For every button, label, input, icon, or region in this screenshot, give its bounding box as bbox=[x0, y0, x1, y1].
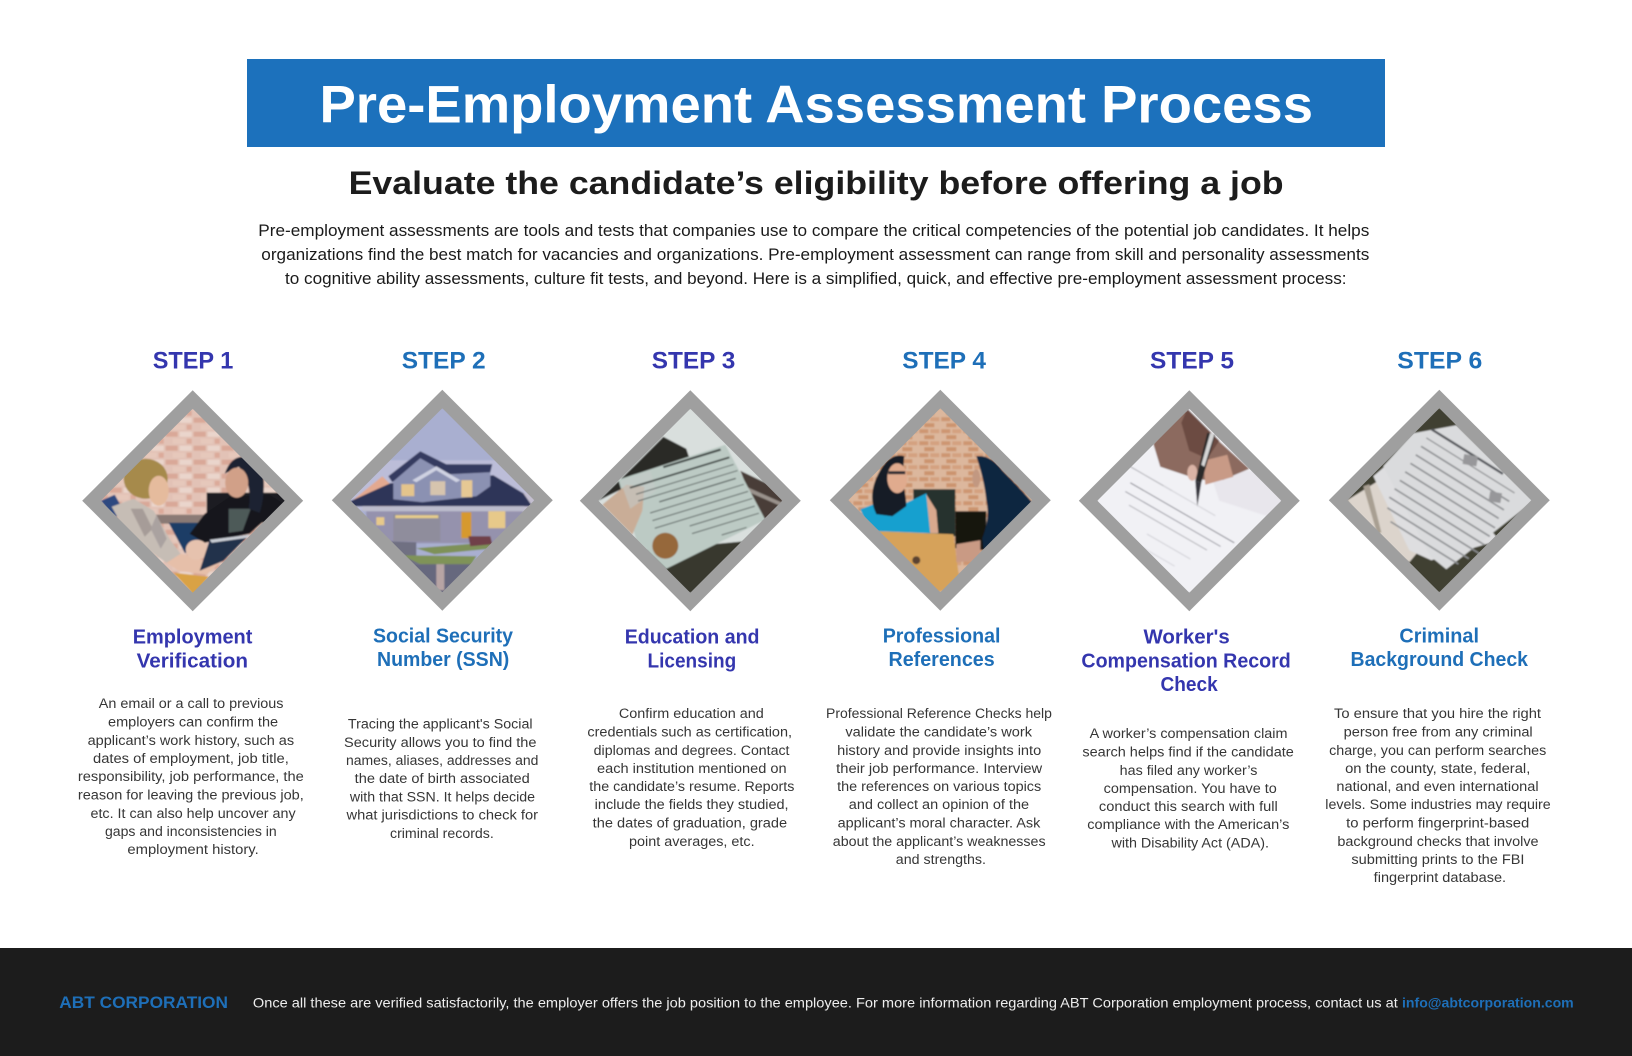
step 5 description: has filed any worker’s bbox=[1120, 763, 1258, 778]
step 1 description: applicant’s work history, such as bbox=[88, 733, 294, 748]
step 2 description: what jurisdictions to check for bbox=[345, 807, 539, 822]
step 4 description: history and provide insights into bbox=[837, 743, 1041, 758]
step 3 description: each institution mentioned on bbox=[597, 761, 787, 776]
step 4 description bbox=[826, 706, 1052, 867]
step 1 description: An email or a call to previous bbox=[99, 696, 284, 711]
step 1 heading: Employment bbox=[133, 625, 253, 648]
step 6 description: submitting prints to the FBI bbox=[1351, 852, 1524, 867]
step 5 label: STEP 5 bbox=[1150, 348, 1234, 374]
step 5 description: A worker’s compensation claim bbox=[1090, 726, 1288, 741]
intro paragraph: organizations find the best match for vacancies and organizations. Pre-employment assessment can range from skill and personality assessments bbox=[261, 245, 1369, 264]
step 5 description: search helps find if the candidate bbox=[1082, 745, 1294, 760]
step 6 description: fingerprint database. bbox=[1374, 870, 1506, 885]
step 6 description: person free from any criminal bbox=[1344, 725, 1533, 740]
contact email: info@abtcorporation.com bbox=[1402, 996, 1574, 1010]
step 2 heading bbox=[373, 624, 514, 671]
intro paragraph: to cognitive ability assessments, culture fit tests, and beyond. Here is a simplified, quick, and effective pre-employment assessment process: bbox=[285, 269, 1346, 288]
step 3 description bbox=[587, 706, 795, 849]
step 3 description: credentials such as certification, bbox=[587, 725, 792, 740]
step 4 description: validate the candidate’s work bbox=[845, 725, 1032, 740]
step 6 heading: Background Check bbox=[1350, 648, 1529, 671]
step 5 diamond photo: hand signing document bbox=[1079, 390, 1300, 611]
company name: ABT CORPORATION bbox=[59, 994, 228, 1012]
step 2 label: STEP 2 bbox=[402, 348, 486, 374]
step 2 diamond photo: house at dusk bbox=[332, 390, 553, 611]
step 5 heading: Compensation Record bbox=[1081, 650, 1291, 673]
intro paragraph: Pre-employment assessments are tools and tests that companies use to compare the critical competencies of the potential job candidates. It helps bbox=[258, 221, 1369, 240]
step 4 heading bbox=[883, 624, 1000, 671]
step 6 description bbox=[1325, 706, 1551, 885]
step 4 description: and strengths. bbox=[896, 852, 986, 867]
step 6 description: background checks that involve bbox=[1337, 834, 1539, 849]
step 6 description: levels. Some industries may require bbox=[1325, 797, 1551, 812]
step 5 description: compensation. You have to bbox=[1104, 781, 1277, 796]
step 4 heading: References bbox=[888, 648, 995, 671]
step 2 description: the date of birth associated bbox=[355, 771, 530, 786]
step 3 description: point averages, etc. bbox=[629, 834, 755, 849]
step 4 column bbox=[826, 348, 1052, 867]
step 4 description: and collect an opinion of the bbox=[849, 797, 1029, 812]
step 4 heading: Professional bbox=[883, 624, 1000, 647]
step 6 description: To ensure that you hire the right bbox=[1334, 706, 1541, 721]
step 3 description: diplomas and degrees. Contact bbox=[594, 743, 790, 758]
step 1 description: dates of employment, job title, bbox=[93, 751, 289, 766]
step 4 label: STEP 4 bbox=[902, 348, 986, 374]
step 3 description: Confirm education and bbox=[619, 706, 764, 721]
step 2 description: criminal records. bbox=[390, 826, 494, 841]
step 6 description: national, and even international bbox=[1336, 779, 1539, 794]
step 3 heading: Licensing bbox=[648, 650, 736, 673]
step 4 description: about the applicant’s weaknesses bbox=[833, 834, 1046, 849]
step 2 column bbox=[332, 348, 553, 841]
step 1 diamond photo: two women talking bbox=[82, 390, 303, 611]
step 1 description: responsibility, job performance, the bbox=[78, 769, 304, 784]
step 5 column bbox=[1079, 348, 1300, 851]
step 5 heading: Worker's bbox=[1144, 625, 1230, 648]
step 4 description: applicant’s moral character. Ask bbox=[838, 816, 1041, 831]
step 3 column bbox=[580, 348, 801, 849]
step 6 heading bbox=[1350, 624, 1529, 671]
step 1 description: employment history. bbox=[127, 842, 259, 857]
step 2 description: Security allows you to find the bbox=[344, 735, 536, 750]
step 6 description: charge, you can perform searches bbox=[1329, 743, 1547, 758]
step 1 label: STEP 1 bbox=[153, 348, 233, 374]
step 2 description: names, aliases, addresses and bbox=[346, 753, 538, 768]
step 2 heading: Number (SSN) bbox=[377, 648, 509, 671]
step 1 heading bbox=[133, 625, 253, 673]
step 5 heading bbox=[1081, 625, 1291, 696]
step 2 heading: Social Security bbox=[373, 624, 514, 647]
footer bar bbox=[0, 948, 1632, 1056]
step 3 diamond photo: diploma bbox=[580, 390, 801, 611]
step 5 heading: Check bbox=[1160, 673, 1218, 696]
step 6 description: to perform fingerprint-based bbox=[1346, 816, 1529, 831]
step 3 heading: Education and bbox=[625, 625, 760, 648]
step 1 description: gaps and inconsistencies in bbox=[105, 824, 277, 839]
intro paragraph bbox=[258, 221, 1369, 288]
step 6 label: STEP 6 bbox=[1397, 348, 1482, 374]
step 6 description: on the county, state, federal, bbox=[1345, 761, 1530, 776]
step 4 description: the references on various topics bbox=[837, 779, 1042, 794]
step 5 description: conduct this search with full bbox=[1099, 799, 1278, 814]
step 3 label: STEP 3 bbox=[652, 348, 735, 374]
step 1 description bbox=[78, 696, 304, 857]
step 6 heading: Criminal bbox=[1399, 624, 1479, 647]
step 2 description bbox=[344, 716, 539, 841]
subtitle: Evaluate the candidate’s eligibility before offering a job bbox=[349, 165, 1284, 201]
step 2 description: Tracing the applicant's Social bbox=[348, 716, 533, 731]
step 3 description: include the fields they studied, bbox=[595, 797, 789, 812]
title banner: Pre-Employment Assessment Process bbox=[320, 76, 1313, 135]
title banner bbox=[247, 59, 1385, 147]
step 5 description: with Disability Act (ADA). bbox=[1110, 836, 1269, 851]
step 6 diamond photo: background check forms bbox=[1329, 390, 1550, 611]
step 1 column bbox=[78, 348, 304, 857]
step 1 heading: Verification bbox=[137, 650, 248, 673]
closing note: Once all these are verified satisfactorily, the employer offers the job position to the employee. For more information regarding ABT Corporation employment process, contact us at bbox=[253, 996, 1398, 1010]
step 4 description: their job performance. Interview bbox=[836, 761, 1043, 776]
step 4 description: Professional Reference Checks help bbox=[826, 706, 1052, 721]
step 4 diamond photo: interview with laptop bbox=[830, 390, 1051, 611]
step 5 description bbox=[1082, 726, 1294, 851]
step 3 description: the candidate’s resume. Reports bbox=[589, 779, 795, 794]
step 1 description: etc. It can also help uncover any bbox=[90, 806, 296, 821]
step 6 column bbox=[1325, 348, 1551, 885]
step 1 description: employers can confirm the bbox=[108, 715, 278, 730]
step 1 description: reason for leaving the previous job, bbox=[78, 787, 304, 802]
step 3 description: the dates of graduation, grade bbox=[593, 816, 787, 831]
step 2 description: with that SSN. It helps decide bbox=[349, 789, 535, 804]
step 5 description: compliance with the American’s bbox=[1087, 817, 1290, 832]
step 3 heading bbox=[625, 625, 760, 673]
